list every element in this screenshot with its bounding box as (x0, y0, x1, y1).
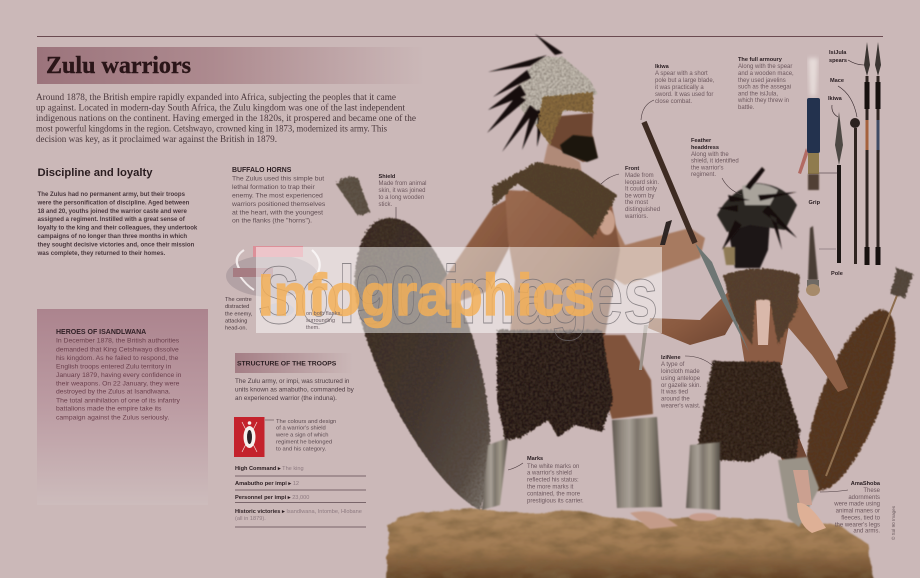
label: ikiwa: A spear with a short (655, 71, 708, 77)
panel: structure of the troops: units known as amabutho, commanded by (235, 386, 355, 394)
label: marks: The white marks on (527, 464, 579, 470)
label: feather headdress: Feather (691, 138, 712, 144)
label: iziNene: It was tied (661, 390, 688, 396)
label: amashoba: were made using (833, 502, 880, 508)
label: marks: contained, the more (527, 492, 581, 498)
skirt (695, 361, 800, 465)
label: front: warriors. (624, 214, 648, 220)
label: marks: prestigious its carrier. (527, 498, 584, 504)
label: amashoba: AmaShoba (851, 481, 881, 487)
text: flanks of formation: surrounding (306, 318, 335, 324)
main warrior shield (336, 177, 490, 510)
label: ikiwa: sword. It was used for (655, 92, 713, 98)
intro paragraph: Around 1878, the British empire rapidly expanded into Africa, subjecting the peoples that it came (36, 92, 396, 102)
label: the full armoury: and the isiJula, (738, 92, 778, 98)
label: front: leopard skin. (625, 180, 659, 186)
text: centre of formation: The centre (225, 297, 252, 303)
label: shield: Made from animal (378, 181, 427, 187)
credit: © Sol 90 Images (890, 505, 896, 540)
text: buffalo horns (231, 167, 326, 224)
label: iziNene: loincloth made (661, 369, 700, 375)
label: isiJula spears: IsiJula (829, 50, 847, 56)
panel: structure of the troops: STRUCTURE OF THE TROOPS (237, 360, 337, 368)
label: amashoba: adornments (848, 495, 880, 501)
label: ikiwa weapon (828, 96, 843, 117)
text: flanks of formation (306, 311, 342, 331)
face (550, 113, 597, 162)
text: discipline and loyalty: were the personification of discipline. Aged between (36, 199, 190, 206)
label: mace (830, 78, 857, 117)
label: marks: the more marks it (527, 484, 574, 490)
arm right (600, 205, 705, 285)
intro paragraph (36, 92, 416, 144)
text: centre of formation: attacking (225, 318, 247, 324)
leg guard right (778, 457, 819, 527)
label: the full armoury (737, 57, 794, 111)
label: the full armoury: The full armoury (738, 57, 783, 63)
text: buffalo horns: The Zulus used this simple but (232, 176, 324, 182)
panel: structure of the troops: High Command ▸ The king (235, 466, 304, 472)
label: front: It could only (625, 186, 657, 192)
label: the full armoury: Along with the spear (738, 64, 792, 70)
rear leg guard (482, 438, 508, 510)
label: marks: reflected his status: (527, 478, 579, 484)
headband (723, 247, 735, 265)
panel: heroes of Isandlwana: destroyed by the Zulus at Isandlwana. (56, 388, 171, 396)
main spear (639, 122, 749, 370)
label: ikiwa: close combat. (655, 99, 692, 105)
label: iziNene: using antelope (661, 376, 701, 382)
text: flanks of formation: on both flanks, (306, 311, 342, 317)
label: front: the most (625, 200, 648, 206)
label: shield: stick. (378, 202, 392, 208)
label: amashoba (820, 481, 881, 534)
weapons panel: close-up grip (798, 58, 820, 190)
panel: structure of the troops: regiment he belonged (276, 440, 332, 446)
leopard cape (492, 162, 617, 238)
panel: structure of the troops: Historic victories ▸ Isandlwana, Intombe, Hlobane (235, 509, 362, 515)
label: isiJula spears (829, 50, 864, 65)
weapons: ikiwa spear (835, 112, 843, 263)
label: grip (808, 173, 838, 206)
label: the full armoury: which they threw in (737, 98, 789, 104)
fur skirt (497, 330, 613, 440)
label: the full armoury: battle. (738, 105, 755, 111)
weapons: mace (850, 118, 860, 264)
thigh (588, 335, 653, 419)
label: shield: to a long wooden (378, 195, 424, 201)
text: discipline and loyalty: The Zulus had no permanent army, but their troops (38, 191, 186, 198)
panel: structure of the troops: The Zulu army, or impi, was structured in (235, 378, 350, 385)
label: the full armoury: they used javelins (738, 78, 786, 84)
label: marks (508, 456, 584, 504)
title banner (37, 47, 425, 84)
label: pole (819, 249, 843, 277)
intro paragraph: most powerful kingdoms in the region. Cetshwayo, crowned king in 1873, modernized its army. This (36, 124, 387, 134)
panel: heroes of Isandlwana: The total annihilation of one of its infantry (56, 398, 181, 404)
main warrior (438, 34, 705, 529)
label: iziNene: IziNene (661, 355, 681, 361)
rear warrior (648, 167, 913, 533)
panel: structure of the troops: were a sign of which (275, 432, 329, 438)
panel: heroes of Isandlwana: HEROES OF ISANDLWANA (56, 329, 146, 336)
text: buffalo horns: at the heart, with the youngest (232, 210, 323, 216)
watermark: Sol90 images (258, 250, 658, 341)
text: discipline and loyalty (36, 191, 198, 257)
panel: heroes of Isandlwana: January 1879, having every confidence in (56, 372, 182, 379)
label: iziNene: or gazelle skin. (661, 383, 701, 389)
text: discipline and loyalty: was complete, they returned to their homes. (36, 250, 165, 257)
label: shield: Shield (378, 174, 396, 180)
label: iziNene (660, 355, 713, 410)
label: shield: skin, it was joined (378, 188, 426, 194)
neck (543, 143, 582, 175)
label: front: be worn by (625, 194, 654, 200)
panel: structure of the troops: an experienced warrior (the induna). (235, 395, 337, 402)
label: feather headdress (691, 138, 742, 195)
heading: discipline and loyalty: Discipline and loyalty (38, 167, 153, 179)
panel: heroes of Isandlwana: In December 1878, the British authorities (56, 338, 180, 344)
text: buffalo horns: on the flanks (the "horns"). (232, 218, 312, 224)
label: feather headdress: headdress (691, 145, 719, 151)
label: front: Front (625, 166, 639, 172)
text: discipline and loyalty: campaigns of no longer than three months in which (38, 233, 187, 240)
beard (560, 135, 598, 162)
leg guard left (686, 442, 720, 510)
label: ikiwa: pole but a large blade, (655, 78, 715, 84)
label: feather headdress: Along with the (691, 152, 729, 158)
panel: structure of the troops: of a warrior's shield (276, 426, 326, 432)
panel: structure of the troops: Personnel per impi ▸ 23,000 (235, 495, 309, 501)
label: pole: Pole (831, 271, 843, 277)
label: the full armoury: and a wooden mace, (738, 71, 794, 77)
intro paragraph: decision was key, as it proclaimed war against the British in 1879. (36, 134, 277, 144)
text: discipline and loyalty: assigned a regiment. Instilled with a great sense of (38, 216, 186, 223)
text: discipline and loyalty: 18 and 20, youths joined the warrior caste and were (38, 208, 187, 215)
label: iziNene: A type of (661, 362, 685, 368)
label: the full armoury: such as the assegai (738, 84, 791, 90)
leg guard (612, 417, 662, 508)
text: discipline and loyalty: they sought decisive victories and, once their mission (38, 241, 195, 248)
rock pedestal (387, 508, 875, 578)
label: amashoba: These (863, 488, 881, 494)
label: feather headdress: the warrior's (691, 166, 724, 172)
text: centre of formation: head-on. (225, 326, 248, 332)
panel: structure of the troops: The colours and design (276, 419, 336, 425)
label: front: distinguished (625, 207, 660, 213)
text: discipline and loyalty: loyalty to the king and their colleagues, they undertook (38, 225, 198, 232)
text: buffalo horns: BUFFALO HORNS (232, 167, 292, 174)
label: feather headdress: shield, it identified (691, 158, 739, 164)
label: front (601, 166, 660, 220)
label: marks: a warrior's shield (527, 470, 572, 476)
weapons panel: close-up pole (806, 226, 820, 296)
feather headdress (487, 34, 597, 152)
text: buffalo horns: lethal formation to trap their (232, 184, 315, 191)
head (727, 220, 770, 268)
label: iziNene: around the (661, 396, 690, 402)
label: ikiwa weapon: Ikiwa (828, 96, 843, 102)
label: ikiwa: it was practically a (655, 85, 704, 91)
panel: structure of the troops: Amabutho per impi ▸ 12 (235, 481, 299, 487)
text: buffalo horns: warriors positioned themselves (231, 201, 326, 208)
label: amashoba: the wearer's legs (835, 522, 880, 528)
text: centre of formation (225, 297, 253, 332)
head band (537, 92, 593, 145)
panel: structure of the troops (234, 353, 366, 527)
weapons: isiJula spears (864, 42, 881, 265)
torso (505, 190, 620, 335)
rear warrior shield (789, 268, 913, 500)
text: centre of formation: distracted (225, 304, 249, 310)
panel: heroes of Isandlwana: campaign against the Zulus seriously. (56, 414, 169, 422)
watermark: Infographics (258, 263, 595, 328)
panel: heroes of Isandlwana: their weapons. On 22 January, they were (56, 380, 180, 388)
feathers (717, 167, 797, 250)
panel: heroes of Isandlwana: his kingdom. As he failed to respond, the (56, 355, 179, 362)
panel: structure of the troops: (all in 1879). (235, 516, 266, 522)
label: front: Made from (625, 173, 654, 179)
text: flanks of formation: them. (306, 325, 320, 331)
label: grip: Grip (808, 200, 821, 206)
arm left (438, 190, 526, 305)
label: ikiwa: Ikiwa (655, 64, 670, 70)
panel: heroes of Isandlwana: demanded that King Cetshwayo dissolve (56, 346, 179, 354)
label: marks: Marks (527, 456, 543, 462)
label: feather headdress: regiment. (691, 172, 716, 178)
text: centre of formation: the enemy, (225, 312, 253, 318)
panel: structure of the troops: to and his category. (276, 446, 327, 452)
icon: regimental shield (234, 417, 264, 457)
text: buffalo horns: enemy. The most experienced (232, 192, 323, 200)
panel: heroes of Isandlwana (37, 309, 208, 505)
label: amashoba: animal manes or (836, 508, 880, 514)
panel: heroes of Isandlwana: battalions made the empire take its (56, 406, 162, 412)
intro paragraph: up against. Located in modern-day South Africa, the Zulu kingdom was one of the last independent (36, 102, 406, 112)
diagram: buffalo horns formation (226, 246, 320, 317)
label: amashoba: fleeces, tied to (841, 516, 881, 522)
label: shield (378, 174, 427, 219)
label: isiJula spears: spears (829, 58, 847, 64)
label: iziNene: wearer's waist. (660, 404, 701, 410)
intro paragraph: indigenous nations on the continent. Having emerged in the 1820s, it prospered and became one of the (36, 113, 416, 123)
title banner: Zulu warriors (46, 53, 191, 79)
label: mace: Mace (830, 78, 844, 84)
panel: heroes of Isandlwana: English troops entered Zulu territory in (56, 364, 171, 370)
label: amashoba: and arms. (853, 528, 880, 534)
label: ikiwa (641, 64, 715, 120)
